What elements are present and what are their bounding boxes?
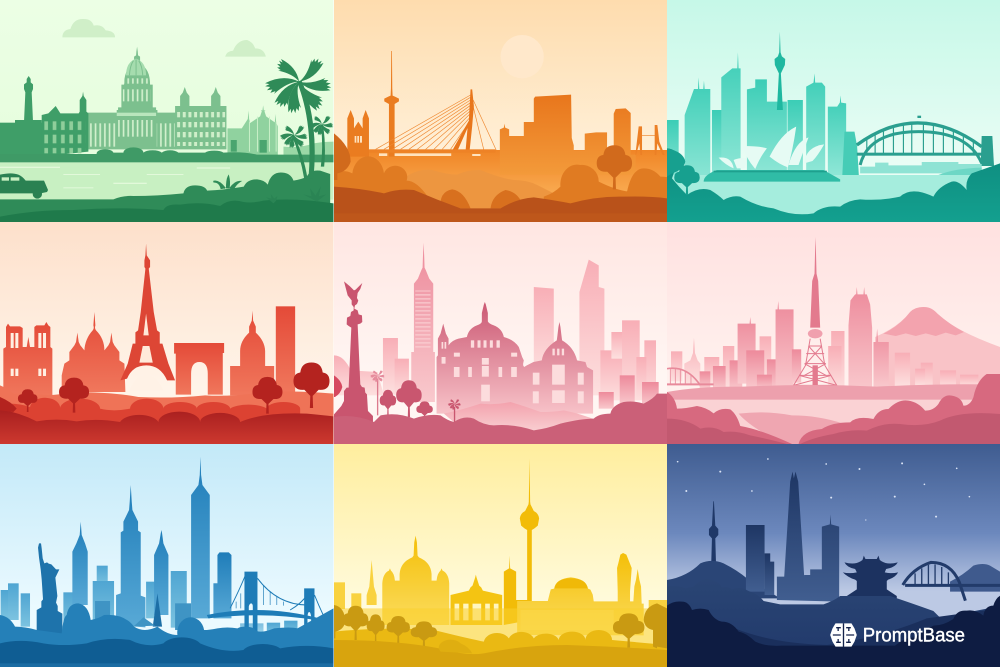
orange ground mass	[334, 150, 667, 203]
Statue of Liberty	[37, 543, 62, 640]
traditional palace	[843, 556, 898, 606]
stars	[677, 458, 970, 521]
panel: Berlin yellow skyline	[334, 444, 667, 667]
Invalides dome	[230, 311, 274, 395]
foreground foliage	[667, 148, 1000, 222]
main towers	[72, 457, 231, 627]
Arc de Triomphe	[174, 343, 224, 395]
palms and small trees	[334, 369, 461, 422]
Notre-Dame cathedral	[3, 322, 52, 397]
layered hills	[0, 385, 334, 446]
Eiffel Tower	[120, 244, 175, 390]
foreground treeline	[667, 582, 1000, 667]
mid hills and bushes	[334, 629, 667, 667]
Mount Fuji	[875, 307, 1000, 389]
shoreline trees	[0, 147, 334, 163]
church	[227, 105, 278, 160]
distant buildings	[1, 566, 297, 634]
harbour trees	[667, 148, 700, 195]
skyscrapers	[746, 472, 839, 602]
mid hills	[406, 170, 554, 213]
bridge pier	[842, 132, 865, 178]
front hill	[334, 187, 667, 222]
tree rows	[334, 603, 667, 648]
water	[667, 175, 1000, 222]
mist and water	[667, 384, 1000, 444]
water	[0, 162, 334, 200]
panel: Mexico City pink skyline	[334, 222, 667, 444]
panel: Sydney teal skyline	[667, 0, 1000, 222]
ground mass	[334, 608, 667, 652]
panel: Havana green skyline	[0, 0, 334, 222]
left blocks and spire	[334, 560, 667, 613]
far shore	[860, 162, 982, 173]
hotel with twin towers	[175, 87, 226, 149]
vintage car	[0, 173, 48, 199]
foreground treeline	[334, 394, 667, 444]
bushes	[440, 189, 525, 208]
panel: Tokyo pink skyline	[667, 222, 1000, 444]
cathedral	[347, 110, 369, 157]
capitol building	[87, 47, 176, 149]
clouds	[62, 19, 266, 57]
darker mid buildings	[95, 593, 191, 630]
wordmark: PromptBase	[863, 625, 965, 647]
front hill	[334, 640, 667, 667]
mid hills	[667, 579, 1000, 667]
palm trees	[264, 55, 334, 178]
harbour bridge	[857, 116, 994, 166]
rear hills	[444, 402, 597, 434]
Sacré-Cœur basilica	[62, 312, 125, 392]
red town hall and Fernsehturm	[504, 458, 539, 625]
treelines	[334, 156, 677, 220]
Euromast tower	[384, 51, 399, 157]
trees	[0, 362, 329, 414]
Brandenburg Gate	[451, 575, 502, 625]
Tokyo Tower	[791, 237, 839, 389]
Reichstag and right towers	[517, 553, 644, 635]
Opera House	[704, 127, 840, 182]
arch bridge	[903, 562, 1000, 601]
foreground foliage	[0, 170, 334, 222]
Bellas Artes palace	[437, 302, 593, 414]
Erasmus bridge	[369, 89, 496, 156]
left arch bridge	[667, 368, 714, 385]
city blocks	[500, 95, 636, 175]
panel: Rotterdam orange skyline	[334, 0, 667, 222]
palace and lighthouse in dark green	[0, 76, 88, 157]
Latinoamericana tower	[411, 243, 435, 402]
right bridge	[635, 125, 665, 155]
rectangular tower	[276, 306, 295, 393]
PromptBase logo	[830, 623, 965, 647]
panel: New York blue skyline	[0, 444, 334, 667]
distant right hills	[283, 142, 334, 160]
foliage layers	[0, 603, 334, 667]
panel: Seoul night skyline	[667, 444, 1000, 667]
back buildings	[671, 331, 978, 391]
Berlin Cathedral	[382, 536, 449, 625]
suspension bridge	[207, 572, 323, 633]
panel: Paris red skyline	[0, 222, 334, 444]
city towers	[667, 32, 846, 189]
foreground treeline	[667, 374, 1000, 445]
pale high-rises	[334, 260, 656, 400]
far mountain	[950, 564, 1000, 592]
brain icon	[830, 623, 857, 647]
middle buildings	[700, 287, 889, 393]
sun	[500, 35, 544, 78]
N Seoul Tower and mountain	[667, 501, 780, 598]
Angel of Independence column	[334, 281, 373, 423]
